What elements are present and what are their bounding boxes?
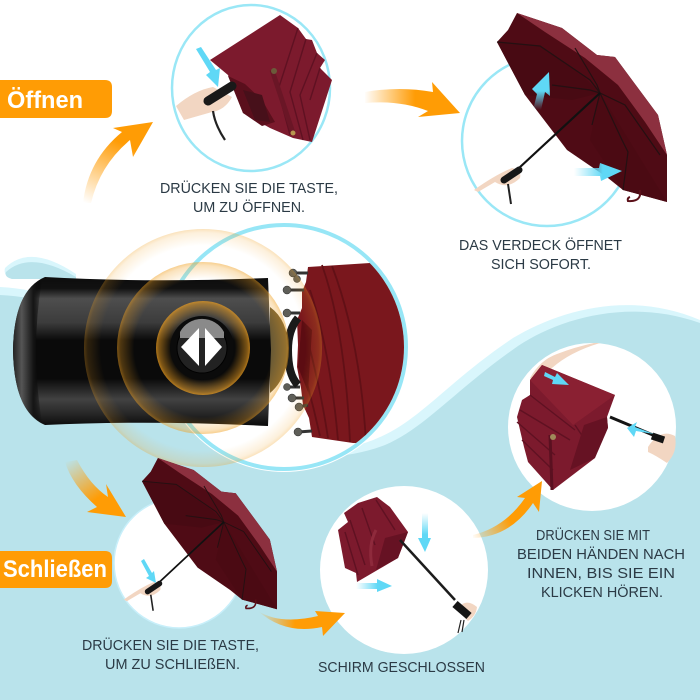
caption: step two xyxy=(459,236,622,273)
light blue wave background xyxy=(0,257,700,700)
icon: canopy press arrow xyxy=(544,372,569,385)
rib tips xyxy=(283,269,312,436)
badge: Schließen xyxy=(0,551,112,588)
caption: press to close: UM ZU SCHLIEßEN. xyxy=(105,657,240,673)
folded umbrella canopy xyxy=(210,15,332,142)
arrow: Öffnen to step one xyxy=(83,122,153,203)
caption: press both hands: KLICKEN HÖREN. xyxy=(541,583,663,601)
icon: right arrow xyxy=(356,579,392,592)
icon: up arrow xyxy=(532,72,550,110)
panel: press button to open xyxy=(172,5,332,171)
caption: press both hands: DRÜCKEN SIE MIT xyxy=(536,526,650,544)
arm on canopy xyxy=(530,343,600,382)
closeup canopy xyxy=(297,263,404,444)
handle and hand xyxy=(610,417,676,463)
panel: umbrella opens xyxy=(462,13,667,226)
handle button xyxy=(170,316,234,380)
panel: press both hands inward xyxy=(508,343,676,511)
icon: press arrow xyxy=(141,559,156,583)
caption: step one: UM ZU ÖFFNEN. xyxy=(193,198,305,216)
caption: press to close xyxy=(82,636,259,673)
folded canopy xyxy=(517,365,615,490)
icon: press arrow xyxy=(196,47,220,87)
panel: closeup of handle button xyxy=(13,222,420,472)
panel: umbrella closed xyxy=(320,486,488,654)
open umbrella small xyxy=(124,458,277,611)
icon: handle press arrow xyxy=(627,422,654,437)
caption: step two: DAS VERDECK ÖFFNET xyxy=(459,236,622,254)
badge: Öffnen xyxy=(0,80,112,118)
arrow: closing step to closed step xyxy=(258,611,345,636)
open umbrella xyxy=(474,13,667,204)
caption: press both hands: BEIDEN HÄNDEN NACH xyxy=(517,546,685,563)
arrow: Schließen to closing step xyxy=(65,460,126,517)
arrow: step one to step two xyxy=(365,82,460,117)
handle end collar xyxy=(270,307,288,393)
icon: right arrow xyxy=(574,163,622,181)
hand holding handle xyxy=(176,86,232,140)
caption: press both hands xyxy=(517,526,685,601)
folded canopy xyxy=(338,497,408,582)
caption: step one: DRÜCKEN SIE DIE TASTE, xyxy=(160,179,338,197)
caption: step one xyxy=(160,179,338,216)
detail ring xyxy=(159,222,409,472)
caption: step two: SICH SOFORT. xyxy=(491,257,591,273)
arrow: closed step to press both hands xyxy=(473,481,542,538)
orange pulse rings xyxy=(84,229,322,467)
panel: press button to close xyxy=(114,458,277,628)
icon: down arrow xyxy=(418,513,431,552)
black handle xyxy=(13,277,271,426)
caption: closed: SCHIRM GESCHLOSSEN xyxy=(318,660,485,676)
badge: Schließen: Schließen xyxy=(3,556,107,583)
badge: Öffnen: Öffnen xyxy=(7,87,83,114)
shaft and hand xyxy=(400,540,477,633)
caption: press to close: DRÜCKEN SIE DIE TASTE, xyxy=(82,636,259,654)
caption: press both hands: INNEN, BIS SIE EIN xyxy=(527,566,675,582)
